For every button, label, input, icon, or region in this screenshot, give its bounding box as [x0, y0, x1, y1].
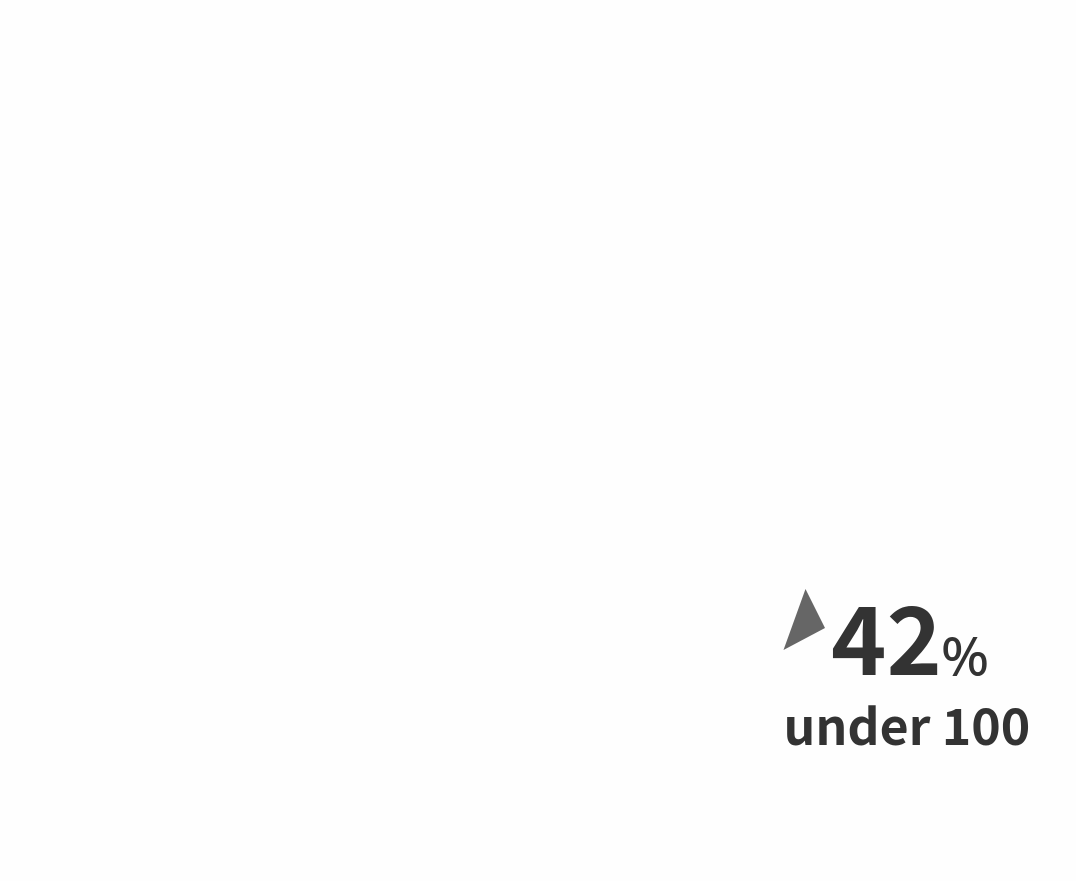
statistic label: under 100: under 100: [784, 688, 1030, 760]
statistic unit: percent sign: %: [942, 618, 988, 690]
icon: grey triangle pointer: [784, 589, 825, 650]
statistic value: 42: 42: [831, 567, 942, 703]
statistic callout: [784, 567, 1030, 760]
